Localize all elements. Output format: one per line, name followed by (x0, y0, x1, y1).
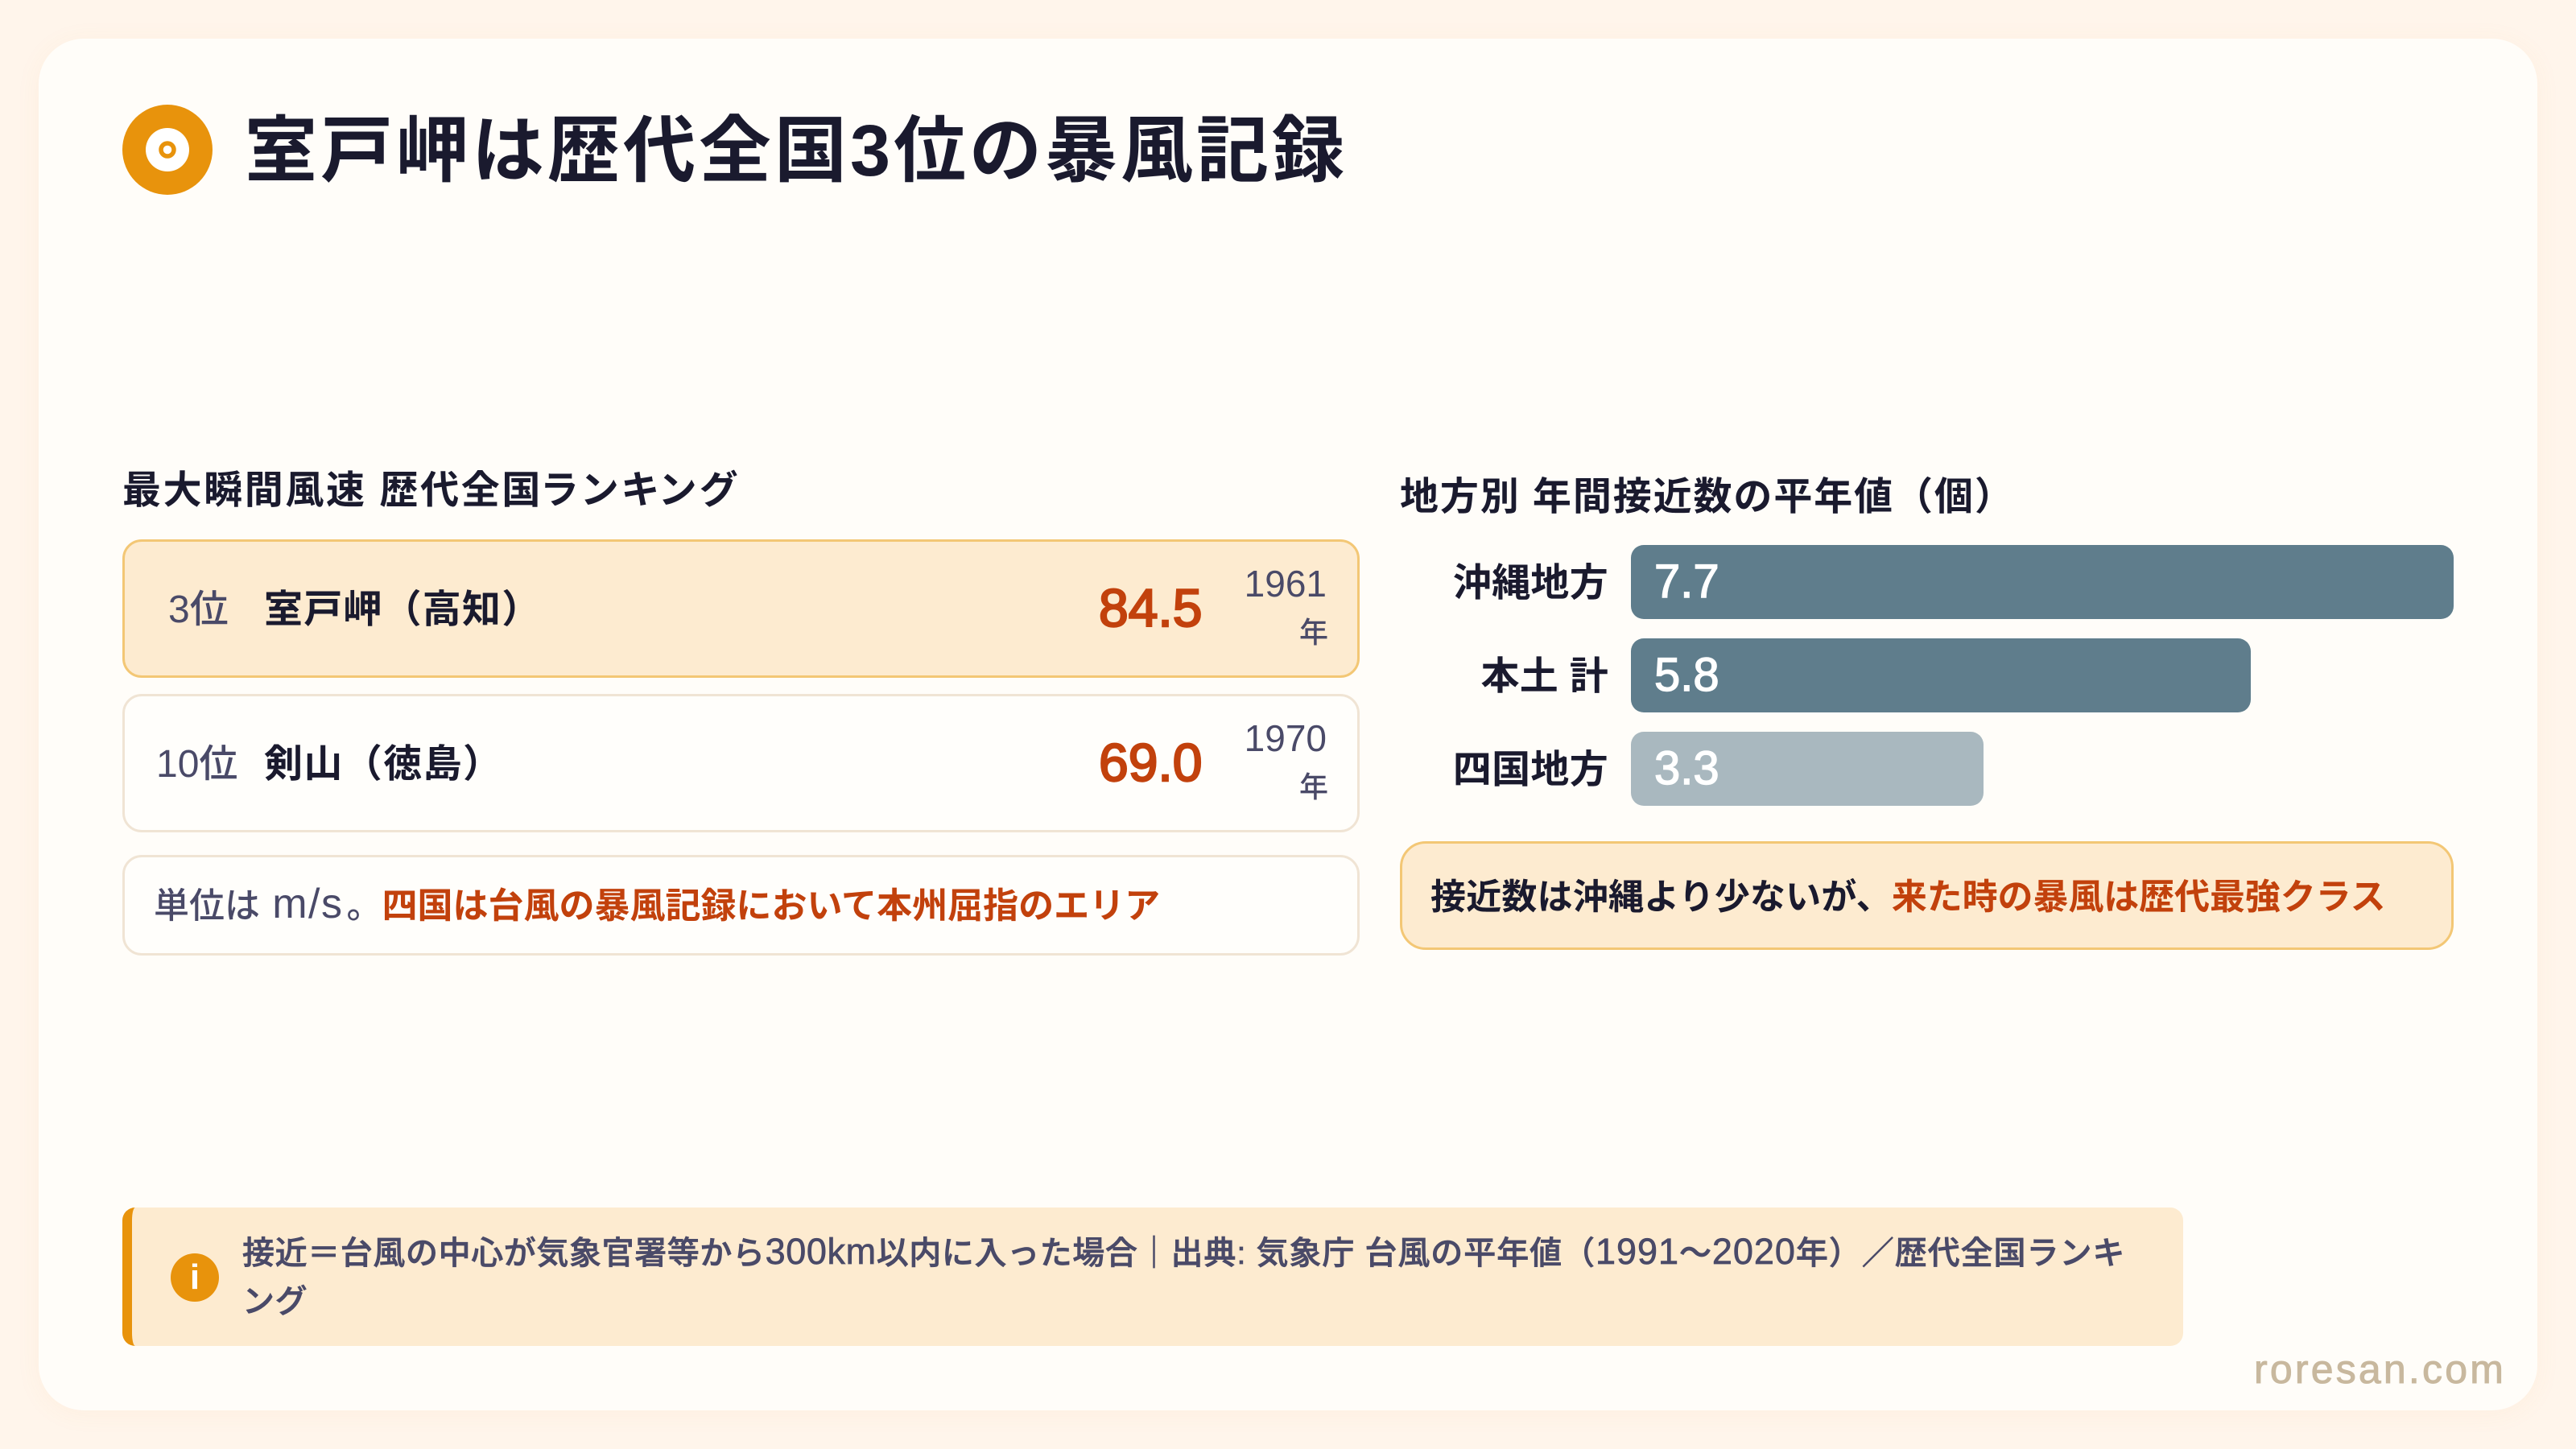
label: Okinawa: 沖縄地方 (1453, 562, 1608, 605)
bar: Okinawa 7.7: 7.7 (1654, 555, 1719, 608)
bar: Shikoku 3.3: 3.3 (1654, 742, 1719, 795)
rank: 3位 (168, 588, 229, 631)
callout (1400, 841, 2454, 950)
heading: ranking: 最大瞬間風速 歴代全国ランキング (122, 469, 741, 512)
title: 室戸岬は歴代全国3位の暴風記録 (245, 111, 1348, 192)
bar: Okinawa 7.7 (1631, 545, 2454, 619)
wind speed: 84.5 (1099, 578, 1202, 638)
icon: typhoon eye (122, 105, 213, 195)
label: Honshu total: 本土 計 (1480, 655, 1608, 698)
icon: info (171, 1253, 219, 1302)
year: 年 (1299, 616, 1328, 649)
ranking row: 10th place (122, 694, 1360, 832)
footnote (122, 1208, 2183, 1346)
year (1245, 563, 1328, 649)
year: 年 (1299, 770, 1328, 803)
note: unit (122, 855, 1360, 956)
heading: bar chart: 地方別 年間接近数の平年値（個） (1400, 476, 2015, 518)
bar: Honshu 5.8: 5.8 (1654, 649, 1719, 701)
year: 1961 (1245, 563, 1327, 605)
location name: 室戸岬（高知） (264, 588, 541, 631)
bar: Honshu 5.8 (1631, 638, 2251, 712)
year (1245, 717, 1328, 803)
footnote text (242, 1231, 2125, 1319)
watermark: roresan.com (2254, 1347, 2506, 1392)
location name: 剣山（徳島） (264, 743, 502, 786)
footnote text: 接近＝台風の中心が気象官署等から300km以内に入った場合｜出典: 気象庁 台風の平年値（1991〜2020年）／歴代全国ランキ (242, 1231, 2125, 1272)
icon: info: i (190, 1257, 200, 1297)
callout text: 接近数は沖縄より少ないが、来た時の暴風は歴代最強クラス (1430, 877, 2386, 917)
footnote text: ング (242, 1284, 308, 1319)
rank: 10位 (156, 743, 237, 786)
year: 1970 (1245, 717, 1327, 759)
note text: 単位は m/s。四国は台風の暴風記録において本州屈指のエリア (154, 881, 1160, 927)
wind speed: 69.0 (1099, 733, 1202, 792)
label: Shikoku: 四国地方 (1453, 749, 1608, 791)
bar: Shikoku 3.3 (1631, 732, 1984, 806)
bar chart (1453, 562, 1608, 791)
ranking row: 3rd place (122, 539, 1360, 678)
